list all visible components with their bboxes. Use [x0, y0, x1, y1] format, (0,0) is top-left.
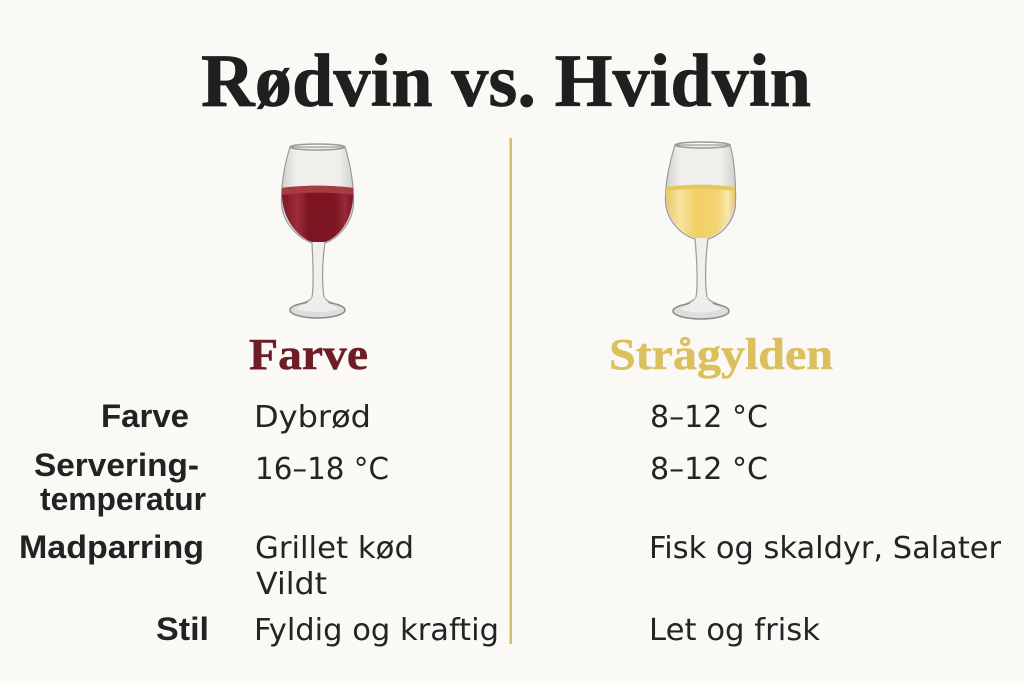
- white value: colour: 8–12 °C: [650, 400, 768, 435]
- red value: food pairing: Vildt: [256, 567, 327, 602]
- red value: temperature: 16–18 °C: [255, 452, 389, 487]
- white value: temperature: 8–12 °C: [650, 452, 768, 487]
- row label: Farve: Farve: [101, 398, 189, 434]
- title: Rødvin vs. Hvidvin: [201, 40, 811, 123]
- red value: style: Fyldig og kraftig: [254, 613, 499, 648]
- row label: Serveringtemperatur: Servering-: [34, 447, 199, 483]
- center divider: [510, 138, 512, 644]
- icon: red wine glass: [281, 144, 354, 318]
- row label: Stil: Stil: [156, 611, 209, 647]
- red value: food pairing: [255, 531, 414, 602]
- icon: white wine glass: [665, 142, 736, 319]
- row label: Serveringtemperatur: temperatur: [40, 481, 206, 517]
- heading: white column: Strågylden: [609, 330, 833, 379]
- red value: food pairing: Grillet kød: [255, 531, 414, 566]
- white value: food pairing: Fisk og skaldyr, Salater: [649, 531, 1002, 566]
- white value: style: Let og frisk: [649, 613, 821, 648]
- heading: red column: Farve: [249, 330, 368, 379]
- row label: Serveringtemperatur: [34, 447, 206, 517]
- row label: Madparring: Madparring: [19, 529, 204, 565]
- red value: colour: Dybrød: [254, 400, 371, 435]
